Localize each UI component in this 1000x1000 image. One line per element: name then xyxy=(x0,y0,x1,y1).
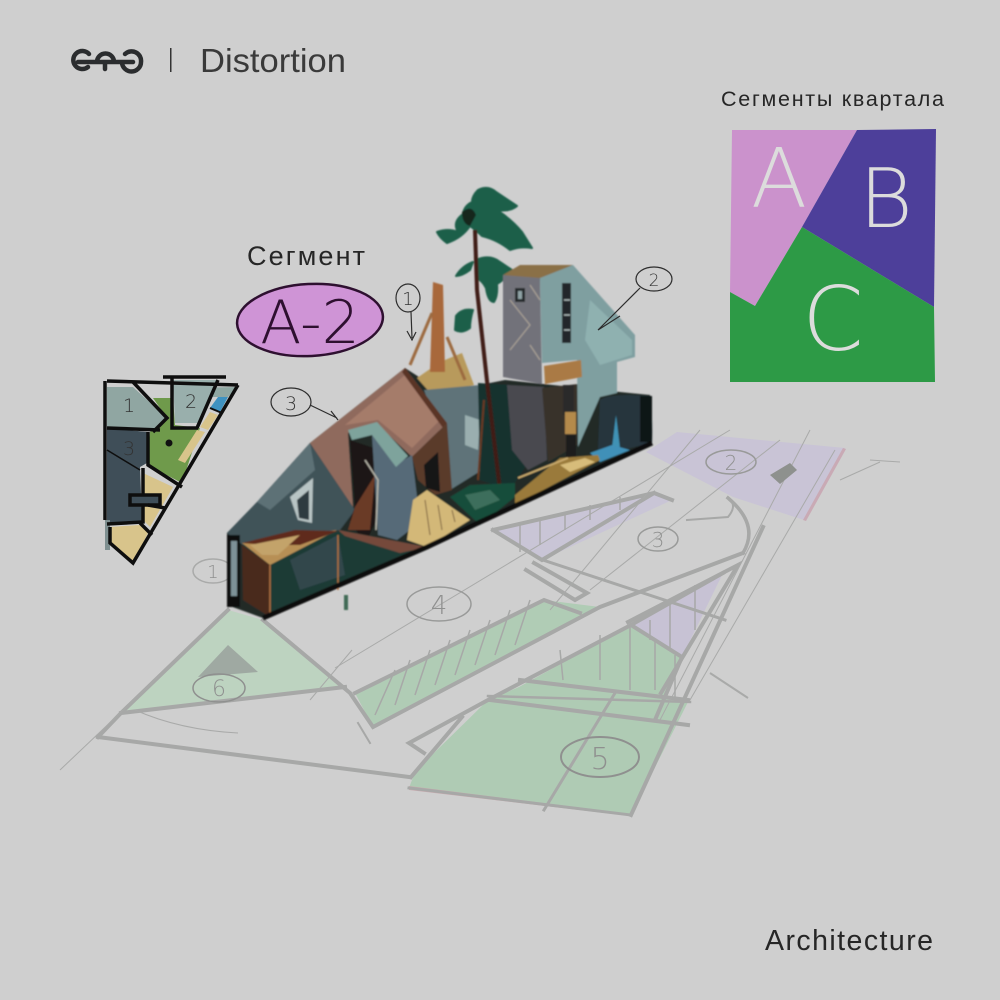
blue water xyxy=(590,445,630,462)
plan outlines xyxy=(98,493,763,815)
zone 4 hatched green xyxy=(355,600,600,727)
callout 1: 1 xyxy=(402,289,414,310)
black base strip xyxy=(263,443,652,618)
yard path xyxy=(515,455,600,505)
hatching xyxy=(375,495,695,715)
silo body xyxy=(424,385,482,490)
header divider xyxy=(170,48,172,72)
silo wood top xyxy=(417,353,474,395)
callout 2: 2 xyxy=(649,271,659,291)
stake under building xyxy=(344,595,348,610)
side wall under roof xyxy=(412,423,452,495)
segment letters: A xyxy=(751,132,807,227)
heading: Сегменты квартала: Сегменты квартала xyxy=(721,87,944,111)
badge: A-2: A-2 xyxy=(260,288,360,358)
main roof xyxy=(310,368,447,507)
building illustration xyxy=(227,188,652,618)
tower front panel xyxy=(503,275,542,384)
dormer blue wall xyxy=(372,435,418,540)
room labels xyxy=(123,391,197,460)
zone numbers xyxy=(193,450,756,777)
room labels: 1 xyxy=(123,395,135,417)
tower lower panel xyxy=(507,385,547,470)
green ground xyxy=(450,483,515,525)
left gable wall xyxy=(227,443,355,545)
badge: A-2 xyxy=(235,280,385,360)
tower window xyxy=(562,283,571,343)
zone numbers: 1 xyxy=(207,562,219,583)
zone 3 hatched purple xyxy=(493,493,672,560)
chimney braces xyxy=(410,313,465,380)
zone 5 green xyxy=(409,625,689,815)
heading: Сегмент: Сегмент xyxy=(247,241,365,271)
mini floor plan xyxy=(105,377,238,563)
callout 2 xyxy=(598,267,672,330)
room fills xyxy=(176,387,238,397)
lower box xyxy=(242,530,427,617)
segment letters: B xyxy=(859,152,913,247)
segment letters: C xyxy=(802,268,864,371)
title: Distortion: Distortion xyxy=(200,42,346,79)
marker: grey bar in zone 2 xyxy=(770,463,797,484)
zone numbers: 3 xyxy=(652,528,664,552)
room labels: 3 xyxy=(123,438,135,460)
dormer teal cap xyxy=(348,422,408,467)
footer: Architecture: Architecture xyxy=(765,925,933,957)
building silhouette base xyxy=(227,368,652,618)
logo mark xyxy=(73,51,141,72)
segments map xyxy=(730,129,936,382)
zone numbers: 5 xyxy=(590,742,610,777)
zone numbers: 2 xyxy=(725,451,737,475)
room labels: 2 xyxy=(185,391,197,413)
segment A xyxy=(730,130,857,306)
pine trunk xyxy=(475,230,500,490)
tree foliage xyxy=(437,188,532,332)
thin construction lines xyxy=(60,430,900,770)
zone numbers: 6 xyxy=(212,677,226,702)
callout 3: 3 xyxy=(285,393,297,415)
arch annex xyxy=(598,395,652,450)
zone 2 purple xyxy=(646,432,845,520)
zone right hatched purple xyxy=(631,573,723,657)
dark mass behind xyxy=(478,383,530,490)
zone numbers: 4 xyxy=(431,591,447,621)
wooden deck xyxy=(407,490,470,547)
ground plan sketch xyxy=(60,430,900,816)
tower teal wall xyxy=(540,265,635,447)
tower balcony xyxy=(544,360,582,384)
zone 6 green xyxy=(121,610,345,713)
segment C xyxy=(730,227,935,382)
left end post xyxy=(227,535,240,607)
callout 3 xyxy=(271,388,338,420)
tree shadow blobs xyxy=(462,209,476,226)
dormer dark side xyxy=(350,440,390,545)
chimney xyxy=(430,282,445,372)
plan walls xyxy=(105,377,238,563)
segment letters xyxy=(751,132,913,371)
segment B xyxy=(802,129,936,307)
callout 1 xyxy=(396,284,420,340)
tower roof xyxy=(503,265,573,280)
